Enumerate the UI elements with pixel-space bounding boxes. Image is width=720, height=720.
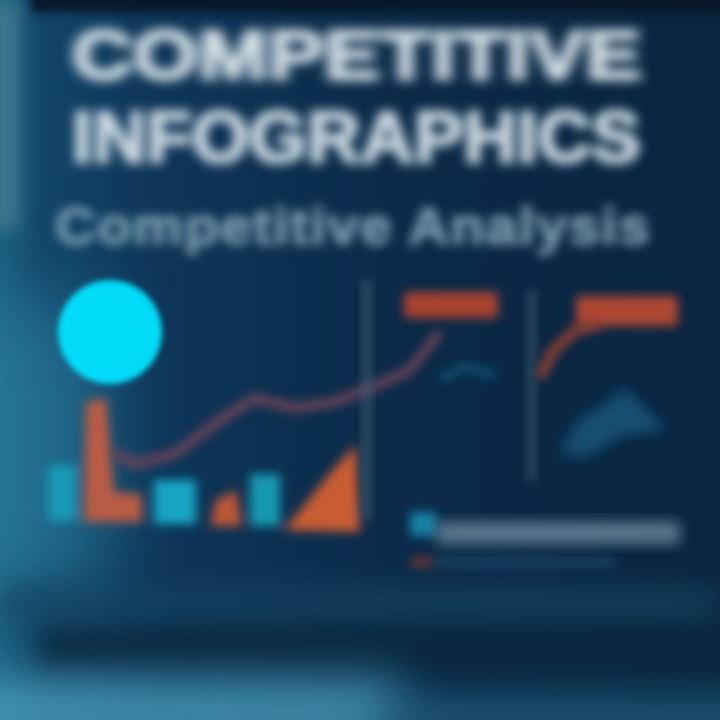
vertical divider right (527, 290, 536, 480)
background glow (0, 300, 100, 600)
bottom glow (0, 678, 400, 720)
red line right (540, 324, 600, 378)
teal mountain chart right (560, 388, 668, 458)
legend red swatch (410, 556, 434, 568)
legend text bar second (436, 556, 616, 568)
legend cyan swatch (410, 512, 436, 536)
line chart: trend line (112, 332, 440, 464)
title line one: COMPETITIVE (72, 16, 641, 94)
red label middle (404, 292, 498, 318)
icon: cyan circle (58, 280, 162, 384)
legend text bar (436, 522, 680, 544)
top edge band (30, 0, 720, 12)
bottom right glow (380, 695, 720, 720)
subtitle: Competitive Analysis (55, 198, 651, 256)
keyboard dark strip (40, 630, 720, 670)
left edge highlight (0, 0, 20, 230)
small teal mark middle (440, 366, 495, 380)
title line two: INFOGRAPHICS (72, 98, 641, 178)
vertical divider left (362, 280, 372, 520)
bar chart: orange and cyan bars (48, 398, 360, 532)
red label right (576, 296, 678, 326)
bottom band (0, 585, 720, 625)
